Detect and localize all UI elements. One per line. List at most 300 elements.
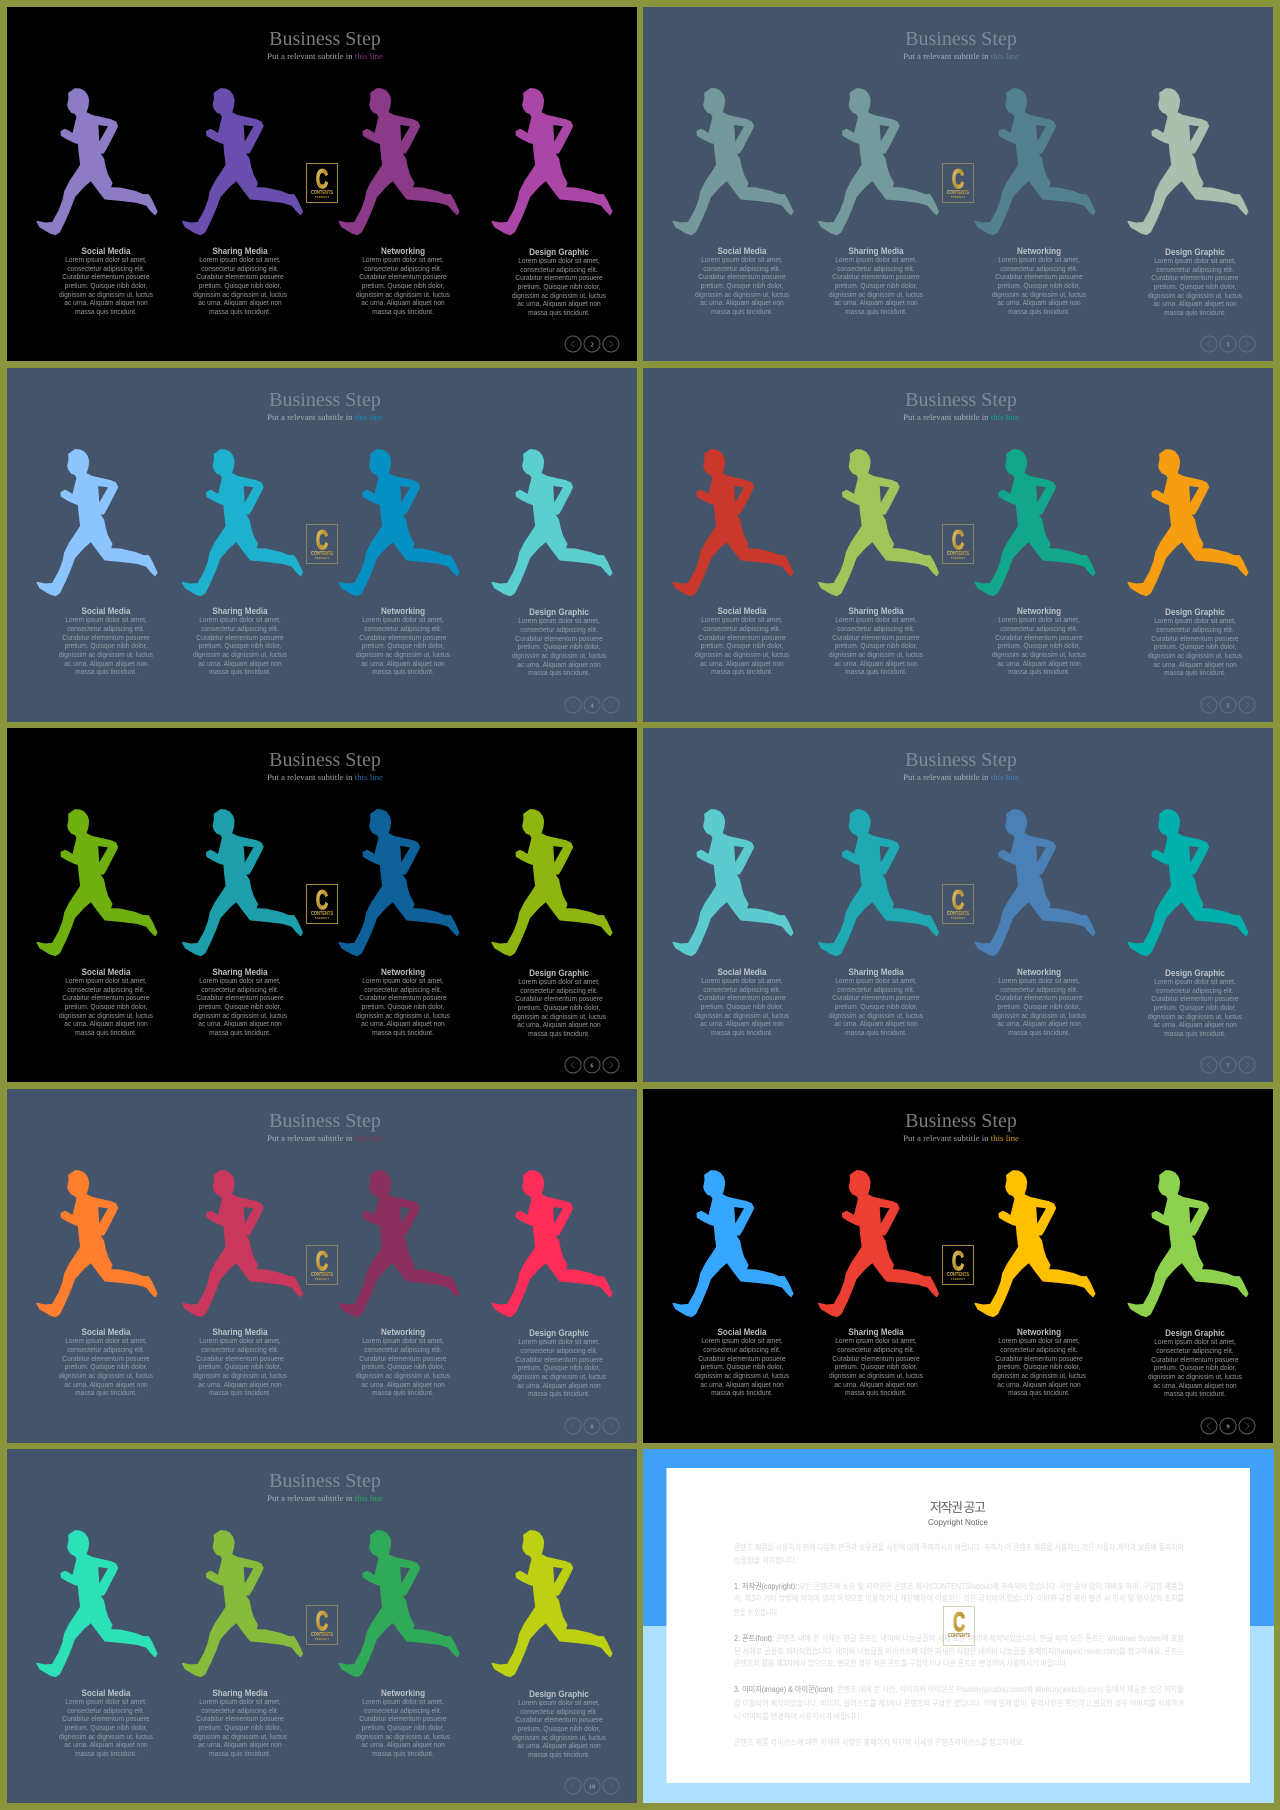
text block: Design Graphic: ac urna. Aliquam aliquet non bbox=[1153, 1381, 1237, 1390]
icon: gold C logo: CONTENTS bbox=[311, 1632, 334, 1638]
text block: Sharing Media: pretium. Quisque nibh dolor, bbox=[198, 1362, 281, 1371]
text block: Social Media bbox=[695, 246, 789, 316]
icon: gold C logo: CONTENTS bbox=[947, 190, 970, 196]
text block: Design Graphic: ac urna. Aliquam aliquet non bbox=[517, 1741, 601, 1750]
text block: Social Media: Social Media bbox=[81, 966, 130, 976]
text block: Social Media: pretium. Quisque nibh dolor, bbox=[701, 1362, 783, 1371]
text block: Sharing Media: massa quis tincidunt. bbox=[209, 1388, 270, 1397]
icon: runner 4 bbox=[492, 1531, 612, 1676]
subtitle: Put a relevant subtitle in this line bbox=[267, 412, 383, 422]
text block: Networking: Lorem ipsum dolor sit amet, bbox=[362, 976, 444, 985]
text block: Design Graphic: ac urna. Aliquam aliquet non bbox=[1153, 1020, 1237, 1029]
text block: Design Graphic: Design Graphic bbox=[529, 246, 589, 256]
text block: Social Media: massa quis tincidunt. bbox=[711, 1028, 773, 1037]
icon: gold C logo bbox=[306, 884, 338, 924]
notice title: 저작권 공고 bbox=[930, 1500, 986, 1515]
text block: Sharing Media: ac urna. Aliquam aliquet non bbox=[834, 298, 917, 307]
text block: Sharing Media: ac urna. Aliquam aliquet non bbox=[198, 1019, 281, 1028]
text block: Design Graphic: consectetur adipiscing elit. bbox=[520, 986, 598, 995]
heading: Business Step bbox=[905, 1110, 1017, 1132]
text block: Sharing Media bbox=[810, 966, 941, 1038]
text block: Networking: Networking bbox=[1017, 606, 1061, 616]
icon: runner 1 bbox=[37, 810, 157, 955]
text block: Social Media: Social Media bbox=[717, 606, 766, 616]
notice body text: 성립함을 의미합니다. bbox=[734, 1555, 797, 1565]
icon: gold C logo: CONTENTS bbox=[947, 911, 970, 917]
text block: Social Media: consectetur adipiscing elit. bbox=[67, 1345, 145, 1354]
text block: Networking: massa quis tincidunt. bbox=[372, 307, 434, 316]
text block: Design Graphic: Curabitur elementum posuere bbox=[1151, 994, 1239, 1003]
text block: Sharing Media: massa quis tincidunt. bbox=[845, 1388, 906, 1397]
icon: gold C logo: CONTENTS bbox=[311, 190, 334, 196]
text block: Design Graphic: massa quis tincidunt. bbox=[1164, 308, 1226, 317]
icon: gold C logo: C bbox=[316, 1606, 328, 1636]
text block: Sharing Media: Sharing Media bbox=[848, 1327, 903, 1337]
icon: gold C logo bbox=[942, 524, 974, 564]
text block: Design Graphic: dignissim ac dignissim ut, luctus bbox=[512, 291, 606, 300]
text block: Design Graphic: consectetur adipiscing elit. bbox=[520, 265, 598, 274]
text block: Networking: massa quis tincidunt. bbox=[372, 1028, 434, 1037]
text block: Social Media: consectetur adipiscing elit. bbox=[67, 985, 145, 994]
text block: Networking: ac urna. Aliquam aliquet non bbox=[997, 298, 1081, 307]
panel: slide 2 (black, purple runners) bbox=[7, 7, 637, 361]
text block: Social Media bbox=[677, 1327, 807, 1398]
text block: Sharing Media: Lorem ipsum dolor sit amet, bbox=[199, 1336, 280, 1345]
icon: gold C logo: CONTENTS bbox=[947, 1272, 970, 1278]
text block: Sharing Media: Curabitur elementum posuere bbox=[832, 272, 919, 281]
notice body text: 1. 저작권(copyright): 모든 콘텐츠의 소유 및 저작권은 콘텐츠 회사(CONTENTStabout)에 귀속되어 있습니다. 사전 승낙 없이 재배포 하여, 구입한 제품을 bbox=[734, 1581, 1184, 1591]
text block: Sharing Media: Sharing Media bbox=[212, 966, 267, 976]
text block: Sharing Media: dignissim ac dignissim ut, luctus bbox=[828, 1371, 922, 1380]
text block: Sharing Media bbox=[192, 966, 287, 1037]
heading: Business Step bbox=[905, 749, 1017, 771]
text block: Networking: Lorem ipsum dolor sit amet, bbox=[362, 1336, 444, 1345]
text block: Sharing Media: Sharing Media bbox=[212, 606, 267, 616]
text block: Design Graphic: massa quis tincidunt. bbox=[528, 1389, 590, 1398]
text block: Networking: dignissim ac dignissim ut, luctus bbox=[992, 290, 1086, 299]
text block: Design Graphic: Design Graphic bbox=[1165, 1328, 1225, 1338]
icon: runner 1 bbox=[673, 449, 793, 595]
text block: Social Media: ac urna. Aliquam aliquet non bbox=[64, 659, 148, 668]
text block: Networking: massa quis tincidunt. bbox=[372, 1388, 434, 1397]
text block: Social Media: Lorem ipsum dolor sit amet, bbox=[701, 615, 783, 624]
icon: runner 3 bbox=[975, 1170, 1095, 1316]
text block: Design Graphic bbox=[1130, 1328, 1260, 1399]
icon: runner 4 bbox=[492, 1170, 612, 1316]
subtitle: Put a relevant subtitle in this line bbox=[903, 772, 1019, 782]
subtitle: Put a relevant subtitle in this line bbox=[903, 412, 1019, 422]
icon: runner 3 bbox=[339, 449, 459, 595]
notice body text bbox=[734, 1542, 1185, 1747]
text block: Social Media: dignissim ac dignissim ut, luctus bbox=[695, 1011, 789, 1020]
icon: gold C logo: C bbox=[952, 164, 964, 194]
icon: gold C logo: TABBOUT bbox=[315, 195, 329, 199]
text block: Social Media: Social Media bbox=[717, 1327, 766, 1337]
text block: Sharing Media: consectetur adipiscing elit. bbox=[201, 1706, 278, 1715]
text block: Sharing Media: pretium. Quisque nibh dolor, bbox=[198, 281, 281, 290]
text block: Sharing Media: pretium. Quisque nibh dolor, bbox=[198, 1723, 281, 1732]
text block: Design Graphic: pretium. Quisque nibh dolor, bbox=[1154, 1003, 1236, 1012]
text block: Sharing Media: pretium. Quisque nibh dolor, bbox=[834, 641, 917, 650]
text block: Networking: Curabitur elementum posuere bbox=[995, 993, 1083, 1002]
icon: gold C logo: CONTENTS bbox=[947, 550, 970, 556]
text block: Design Graphic: ac urna. Aliquam aliquet non bbox=[517, 1381, 601, 1390]
text block: Design Graphic: pretium. Quisque nibh dolor, bbox=[518, 1003, 600, 1012]
icon: gold C logo: C bbox=[952, 1245, 964, 1276]
text block: Social Media: dignissim ac dignissim ut, luctus bbox=[695, 1371, 789, 1380]
notice subtitle: Copyright Notice bbox=[928, 1517, 988, 1527]
text block: Design Graphic: pretium. Quisque nibh dolor, bbox=[518, 1363, 600, 1372]
text block: Networking: Networking bbox=[1017, 246, 1061, 256]
text block: Social Media: consectetur adipiscing elit. bbox=[67, 1706, 145, 1715]
text block: Sharing Media: Curabitur elementum posuere bbox=[832, 993, 919, 1002]
page navigation bbox=[1200, 336, 1256, 352]
text block: Social Media: Social Media bbox=[717, 246, 766, 256]
icon: runner 3 bbox=[339, 89, 459, 234]
text block: Networking: pretium. Quisque nibh dolor, bbox=[362, 281, 444, 290]
text block: Sharing Media: ac urna. Aliquam aliquet non bbox=[834, 1380, 917, 1389]
text block: Social Media: consectetur adipiscing elit. bbox=[703, 264, 781, 273]
text block: Social Media: pretium. Quisque nibh dolor, bbox=[65, 641, 147, 650]
icon: gold C logo: TABBOUT bbox=[951, 1276, 965, 1280]
text block: Social Media: Curabitur elementum posuere bbox=[62, 1714, 150, 1723]
page navigation: 10 bbox=[589, 1783, 595, 1790]
text block: Social Media: Curabitur elementum posuere bbox=[698, 633, 786, 642]
icon: gold C logo: TABBOUT bbox=[315, 556, 329, 560]
runner icons bbox=[7, 1088, 637, 1442]
text block: Social Media bbox=[41, 1688, 171, 1759]
text block: Design Graphic: Curabitur elementum posuere bbox=[1151, 273, 1239, 282]
icon: runner 1 bbox=[673, 1170, 793, 1316]
text block: Sharing Media: Lorem ipsum dolor sit amet, bbox=[199, 976, 280, 985]
icon: gold C logo bbox=[306, 163, 338, 203]
text block: Design Graphic: ac urna. Aliquam aliquet non bbox=[1153, 299, 1237, 308]
icon: gold C logo: CONTENTS bbox=[311, 911, 334, 917]
text block: Networking: Lorem ipsum dolor sit amet, bbox=[362, 615, 444, 624]
icon: runner 2 bbox=[819, 89, 938, 234]
text block: Social Media: consectetur adipiscing elit. bbox=[67, 624, 145, 633]
icon: gold C logo: CONTENTS bbox=[311, 1272, 334, 1278]
text block: Networking: ac urna. Aliquam aliquet non bbox=[361, 1380, 445, 1389]
text block: Networking: Curabitur elementum posuere bbox=[359, 993, 447, 1002]
text block: Sharing Media: Sharing Media bbox=[848, 966, 903, 976]
text block: Networking bbox=[356, 246, 450, 316]
text block: Sharing Media: ac urna. Aliquam aliquet non bbox=[834, 1019, 917, 1028]
text block: Social Media: Social Media bbox=[81, 246, 130, 256]
text block: Social Media: Curabitur elementum posuere bbox=[62, 272, 150, 281]
text block: Design Graphic bbox=[512, 968, 606, 1038]
text block: Sharing Media: massa quis tincidunt. bbox=[845, 1028, 906, 1037]
runner icons bbox=[36, 88, 612, 236]
text block: Sharing Media: ac urna. Aliquam aliquet non bbox=[198, 298, 281, 307]
text block: Sharing Media: Curabitur elementum posuere bbox=[196, 272, 283, 281]
notice body text: 콘텐츠 제품을 사용하기 전에 다음의 판권과 소유권을 사항에 대해 주의하시기 바랍니다. 귀하가 이 콘텐츠 제품을 사용하는 것은 사용자 계약과 보증에 동의하며 bbox=[734, 1542, 1184, 1552]
icon: gold C logo (watermark): CONTENTS bbox=[948, 1633, 971, 1639]
icon: gold C logo (watermark): C bbox=[953, 1607, 965, 1637]
icon: gold C logo: TABBOUT bbox=[315, 1637, 329, 1641]
text block: Design Graphic: Lorem ipsum dolor sit amet, bbox=[1154, 256, 1236, 265]
text block: Sharing Media: Lorem ipsum dolor sit amet, bbox=[835, 255, 916, 264]
text block: Design Graphic: pretium. Quisque nibh dolor, bbox=[518, 282, 600, 291]
text block: Sharing Media bbox=[828, 246, 923, 316]
text block: Sharing Media: Sharing Media bbox=[848, 246, 903, 256]
text block: Social Media: dignissim ac dignissim ut, luctus bbox=[59, 650, 153, 659]
text block: Networking: dignissim ac dignissim ut, luctus bbox=[356, 290, 450, 299]
text block: Social Media: Lorem ipsum dolor sit amet, bbox=[701, 255, 783, 264]
text block: Networking bbox=[338, 1327, 468, 1398]
text block: Social Media: dignissim ac dignissim ut, luctus bbox=[59, 1011, 153, 1020]
text block: Social Media: pretium. Quisque nibh dolor, bbox=[65, 1362, 147, 1371]
icon: gold C logo: CONTENTS bbox=[311, 550, 334, 556]
text block: Design Graphic: pretium. Quisque nibh dolor, bbox=[1154, 1363, 1236, 1372]
runner icons bbox=[643, 728, 1273, 1082]
text block: Design Graphic bbox=[494, 1328, 624, 1399]
text block: Design Graphic bbox=[1130, 968, 1260, 1039]
text block: Design Graphic: Design Graphic bbox=[529, 1328, 589, 1338]
text block: Sharing Media: massa quis tincidunt. bbox=[845, 307, 906, 316]
icon: runner 3 bbox=[339, 810, 459, 955]
runner icons bbox=[36, 809, 612, 956]
page navigation bbox=[564, 336, 620, 352]
icon: runner 3 bbox=[975, 810, 1095, 955]
text block: Sharing Media: dignissim ac dignissim ut, luctus bbox=[828, 1011, 922, 1020]
text block: Networking: Networking bbox=[381, 1327, 425, 1337]
text block: Social Media: Curabitur elementum posuere bbox=[62, 633, 150, 642]
text block: Social Media: Lorem ipsum dolor sit amet, bbox=[701, 1336, 783, 1345]
text block: Design Graphic: consectetur adipiscing elit. bbox=[520, 625, 598, 634]
text block: Design Graphic: dignissim ac dignissim ut, luctus bbox=[512, 651, 606, 660]
text block: Social Media: Social Media bbox=[81, 1688, 130, 1698]
icon: gold C logo: C bbox=[316, 524, 328, 555]
text block: Networking: Networking bbox=[381, 606, 425, 616]
text block: Sharing Media: Lorem ipsum dolor sit amet, bbox=[199, 615, 280, 624]
text block: Social Media: massa quis tincidunt. bbox=[75, 307, 137, 316]
text block: Sharing Media: massa quis tincidunt. bbox=[209, 1749, 270, 1758]
text block: Design Graphic: Design Graphic bbox=[1165, 968, 1225, 978]
page navigation bbox=[564, 696, 620, 714]
notice body text: 상 이용되어 제작되었습니다. 이미지, 일러스트를 제3자나 콘텐츠의 구성한 것입니다. 이에 일체 없이, 유의사항은 확인하고 필요한 경우 이미지를 삭제하거 bbox=[734, 1698, 1184, 1708]
text block: Sharing Media: ac urna. Aliquam aliquet non bbox=[834, 659, 917, 668]
icon: gold C logo bbox=[306, 524, 338, 564]
text block: Social Media: Curabitur elementum posuere bbox=[62, 993, 150, 1002]
text block: Networking bbox=[356, 966, 450, 1037]
text block: Design Graphic: massa quis tincidunt. bbox=[1164, 1029, 1226, 1038]
text block: Sharing Media: dignissim ac dignissim ut, luctus bbox=[192, 1011, 286, 1020]
text block: Networking: consectetur adipiscing elit. bbox=[364, 624, 442, 633]
icon: runner 2 bbox=[183, 810, 302, 955]
text block: Design Graphic: Curabitur elementum posuere bbox=[515, 1715, 603, 1724]
text block: Design Graphic: massa quis tincidunt. bbox=[528, 1750, 590, 1759]
text block: Design Graphic: dignissim ac dignissim ut, luctus bbox=[1148, 651, 1242, 660]
text block: Sharing Media: Curabitur elementum posuere bbox=[196, 1714, 283, 1723]
text block: Design Graphic: consectetur adipiscing elit. bbox=[1156, 1346, 1234, 1355]
page navigation: 2 bbox=[590, 341, 594, 348]
text block: Networking: Curabitur elementum posuere bbox=[995, 272, 1083, 281]
text block: Social Media: Lorem ipsum dolor sit amet, bbox=[65, 255, 147, 264]
panel: slide 3 (slate, muted green runners) bbox=[643, 7, 1273, 361]
text block: Social Media: dignissim ac dignissim ut, luctus bbox=[695, 290, 789, 299]
text block: Networking: consectetur adipiscing elit. bbox=[1000, 985, 1078, 994]
icon: runner 4 bbox=[492, 449, 612, 595]
panel: slide 6 (black, green and blue runners) bbox=[7, 728, 637, 1082]
text block: Design Graphic: Curabitur elementum posuere bbox=[515, 273, 603, 282]
text block: Networking: Curabitur elementum posuere bbox=[995, 633, 1083, 642]
text block: Networking: consectetur adipiscing elit. bbox=[364, 985, 442, 994]
icon: runner 3 bbox=[339, 1531, 459, 1676]
text block: Design Graphic: Design Graphic bbox=[1165, 246, 1225, 256]
text block: Sharing Media: pretium. Quisque nibh dolor, bbox=[834, 1002, 917, 1011]
text block: Design Graphic: ac urna. Aliquam aliquet non bbox=[517, 660, 601, 669]
text block: Sharing Media: massa quis tincidunt. bbox=[209, 667, 270, 676]
text block: Networking: consectetur adipiscing elit. bbox=[364, 264, 442, 273]
text block: Design Graphic: massa quis tincidunt. bbox=[528, 1029, 590, 1038]
text block: Social Media: pretium. Quisque nibh dolor, bbox=[701, 641, 783, 650]
text block: Networking: Networking bbox=[1017, 1327, 1061, 1337]
icon: gold C logo: C bbox=[316, 1245, 328, 1276]
panel: slide 5 (slate, red green teal orange runners) bbox=[643, 368, 1273, 722]
subtitle: Put a relevant subtitle in this line bbox=[903, 51, 1019, 61]
subtitle: Put a relevant subtitle in this line bbox=[267, 51, 383, 61]
text block: Design Graphic: consectetur adipiscing elit. bbox=[1156, 265, 1234, 274]
text block: Social Media bbox=[59, 246, 153, 316]
runner icons bbox=[643, 1088, 1273, 1442]
text block: Social Media bbox=[677, 966, 807, 1038]
notice body text: 2. 폰트(font): 콘텐츠 내에 쓴 서체는 한글 폰트는 네이버 나눔글꼴의 서체 또는 네이버 제작되었습니다. 한글 외의 모든 폰트는 Windows System에 포함 bbox=[734, 1633, 1185, 1643]
text block: Design Graphic: Design Graphic bbox=[529, 1688, 589, 1698]
icon: gold C logo: TABBOUT bbox=[951, 916, 965, 920]
text block: Sharing Media bbox=[810, 1327, 941, 1398]
text block: Design Graphic: Design Graphic bbox=[1165, 607, 1225, 617]
text block: Networking: dignissim ac dignissim ut, luctus bbox=[992, 1011, 1086, 1020]
text block: Social Media: dignissim ac dignissim ut, luctus bbox=[59, 290, 153, 299]
icon: gold C logo bbox=[942, 884, 974, 924]
heading: Business Step bbox=[905, 388, 1017, 410]
text block: Networking: consectetur adipiscing elit. bbox=[364, 1706, 442, 1715]
text block: Networking: pretium. Quisque nibh dolor, bbox=[998, 641, 1080, 650]
text block: Networking: pretium. Quisque nibh dolor, bbox=[362, 1723, 444, 1732]
text block: Sharing Media: dignissim ac dignissim ut, luctus bbox=[192, 1732, 286, 1741]
icon: runner 3 bbox=[975, 89, 1095, 234]
text block: Sharing Media: ac urna. Aliquam aliquet non bbox=[198, 1740, 281, 1749]
text block: Networking: Lorem ipsum dolor sit amet, bbox=[998, 976, 1080, 985]
text block: Networking: Curabitur elementum posuere bbox=[359, 633, 447, 642]
text block: Social Media: ac urna. Aliquam aliquet non bbox=[700, 298, 784, 307]
icon: runner 1 bbox=[673, 810, 793, 955]
text block: Sharing Media: dignissim ac dignissim ut, luctus bbox=[192, 650, 286, 659]
icon: runner 2 bbox=[819, 449, 938, 595]
text block: Social Media: ac urna. Aliquam aliquet non bbox=[700, 1380, 784, 1389]
panel: slide 8 (slate, orange and pink runners) bbox=[7, 1088, 637, 1442]
text block: Design Graphic: Curabitur elementum posuere bbox=[1151, 1355, 1239, 1364]
text block: Design Graphic: massa quis tincidunt. bbox=[1164, 1389, 1226, 1398]
text block: Networking: Lorem ipsum dolor sit amet, bbox=[998, 255, 1080, 264]
text block: Social Media: ac urna. Aliquam aliquet non bbox=[64, 298, 148, 307]
text block: Social Media: Curabitur elementum posuere bbox=[698, 1354, 786, 1363]
text block: Social Media: Curabitur elementum posuere bbox=[698, 272, 786, 281]
page navigation: 4 bbox=[590, 702, 594, 709]
text block: Networking: pretium. Quisque nibh dolor, bbox=[998, 1002, 1080, 1011]
text block: Social Media: massa quis tincidunt. bbox=[75, 1388, 137, 1397]
text block: Social Media: massa quis tincidunt. bbox=[711, 1388, 773, 1397]
text block: Design Graphic: dignissim ac dignissim ut, luctus bbox=[512, 1012, 606, 1021]
text block: Networking: massa quis tincidunt. bbox=[1008, 307, 1070, 316]
panel: copyright notice bbox=[643, 1449, 1274, 1803]
notice body text: 3. 이미지(image) & 아이콘(icon): 콘텐츠 내에 쓴 사진, 이미지와 아이콘은 Pixabay(pixabay.com)와 Webiziy(webiziy.com) 등에서 제공한 것은 저작물 bbox=[734, 1684, 1184, 1694]
text block: Networking bbox=[992, 606, 1086, 676]
notice body text: 된 서체로 글꼴로 제작되었습니다. 네이버 나눔글꼴 라이선스에 대한 자세한 사항은 네이버 나눔글꼴 홈페이지(hangeul.naver.com)를 참고하세요. 폰트는 bbox=[734, 1646, 1184, 1656]
heading: Business Step bbox=[269, 388, 381, 410]
text block: Sharing Media: Sharing Media bbox=[212, 1688, 267, 1698]
text block: Sharing Media: consectetur adipiscing elit. bbox=[201, 264, 278, 273]
text block: Networking: massa quis tincidunt. bbox=[372, 667, 434, 676]
text block: Design Graphic bbox=[512, 246, 606, 317]
icon: runner 1 bbox=[37, 89, 157, 234]
text block: Social Media: dignissim ac dignissim ut, luctus bbox=[695, 650, 789, 659]
subtitle: Put a relevant subtitle in this line bbox=[267, 772, 383, 782]
icon: gold C logo: C bbox=[952, 524, 964, 555]
icon: gold C logo: C bbox=[316, 164, 328, 194]
text block: Design Graphic: massa quis tincidunt. bbox=[528, 308, 590, 317]
text block: Networking: Networking bbox=[1017, 966, 1061, 976]
text block: Social Media: dignissim ac dignissim ut, luctus bbox=[59, 1732, 153, 1741]
text block: Design Graphic: Curabitur elementum posuere bbox=[515, 994, 603, 1003]
icon: gold C logo bbox=[942, 1244, 974, 1284]
icon: runner 2 bbox=[183, 89, 302, 234]
icon: runner 4 bbox=[1128, 89, 1248, 234]
text block: Social Media: consectetur adipiscing elit. bbox=[703, 985, 781, 994]
runner icons bbox=[672, 88, 1248, 236]
page navigation bbox=[563, 1776, 623, 1796]
page navigation bbox=[1200, 696, 1256, 714]
text block: Sharing Media: dignissim ac dignissim ut, luctus bbox=[828, 650, 922, 659]
text block: Networking: Curabitur elementum posuere bbox=[359, 1354, 447, 1363]
text block: Sharing Media: Curabitur elementum posuere bbox=[832, 1354, 919, 1363]
text block: Social Media: massa quis tincidunt. bbox=[711, 667, 773, 676]
text block: Sharing Media: consectetur adipiscing elit. bbox=[201, 985, 278, 994]
text block: Networking: Curabitur elementum posuere bbox=[995, 1354, 1083, 1363]
text block: Social Media: Social Media bbox=[81, 606, 130, 616]
icon: runner 3 bbox=[975, 449, 1095, 595]
text block: Networking: ac urna. Aliquam aliquet non bbox=[361, 1019, 445, 1028]
text block: Networking: pretium. Quisque nibh dolor, bbox=[362, 641, 444, 650]
notice body text: 콘텐츠의 활용 제3자에서 임으므로, 필요한 경우 적은 폰트를 구입하거나 다른 폰트로 변경하여 사용하시기 바랍니다. bbox=[734, 1658, 1068, 1668]
text block: Networking: dignissim ac dignissim ut, luctus bbox=[356, 1732, 450, 1741]
text block: Design Graphic: Lorem ipsum dolor sit amet, bbox=[518, 256, 600, 265]
text block: Networking bbox=[338, 1688, 468, 1759]
text block: Networking: dignissim ac dignissim ut, luctus bbox=[992, 650, 1086, 659]
text block: Sharing Media: consectetur adipiscing elit. bbox=[837, 624, 914, 633]
text block: Social Media bbox=[59, 966, 153, 1037]
text block: Sharing Media: Curabitur elementum posuere bbox=[832, 633, 919, 642]
notice body text: 사, 제3자 기타 방법에 의하여 영리 목적으로 이용하거나 재판매하여 이용하는 것은 금지되어 있습니다. 이러한 규정 위반 발견 시 민사 및 형사상의 조치를 bbox=[734, 1593, 1184, 1603]
text block: Social Media bbox=[41, 1327, 171, 1398]
text block: Networking: massa quis tincidunt. bbox=[1008, 1388, 1070, 1397]
page navigation bbox=[1199, 1055, 1259, 1075]
text block: Sharing Media: Sharing Media bbox=[848, 606, 903, 616]
text block: Design Graphic bbox=[494, 1688, 624, 1760]
panel: slide 4 (slate, blue runners) bbox=[7, 368, 637, 722]
text block: Social Media bbox=[59, 606, 153, 676]
icon: runner 3 bbox=[339, 1170, 459, 1316]
heading: Business Step bbox=[269, 28, 381, 50]
icon: runner 4 bbox=[1128, 449, 1248, 595]
text block: Networking bbox=[992, 246, 1086, 316]
text block: Design Graphic: ac urna. Aliquam aliquet non bbox=[517, 1020, 601, 1029]
text block: Sharing Media: Lorem ipsum dolor sit amet, bbox=[835, 615, 916, 624]
text block: Design Graphic: Lorem ipsum dolor sit amet, bbox=[518, 977, 600, 986]
text block: Sharing Media: Lorem ipsum dolor sit amet, bbox=[835, 976, 916, 985]
text block: Networking: Lorem ipsum dolor sit amet, bbox=[998, 1336, 1080, 1345]
